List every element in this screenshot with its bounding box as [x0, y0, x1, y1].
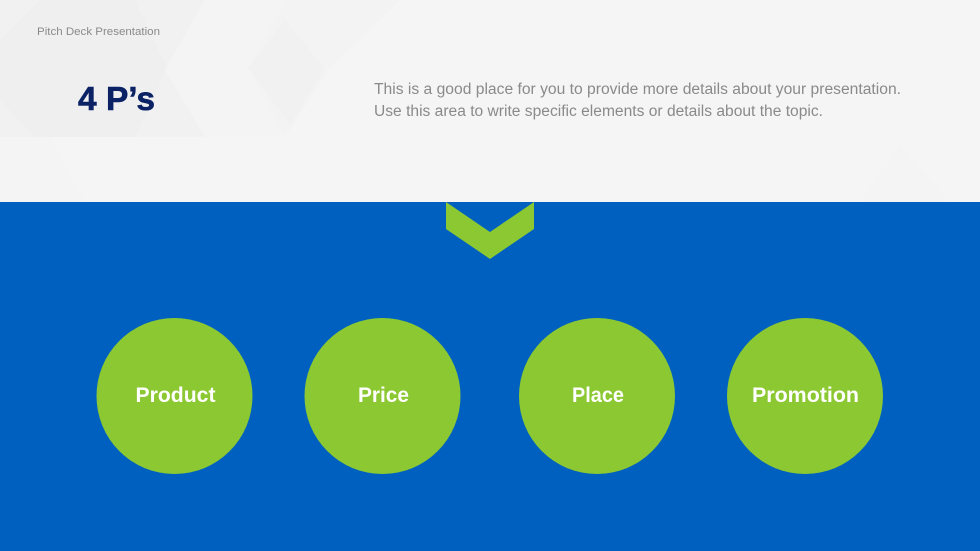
- text block: description: This is a good place for you to provide more details about your presentation.: [374, 81, 901, 98]
- icon: chevron arrow: [446, 202, 534, 259]
- circle: Product: Product: [136, 384, 216, 407]
- text: deck label: Pitch Deck Presentation: [37, 26, 160, 38]
- circle: Place: [519, 318, 675, 474]
- title: 4 P’s: [78, 80, 155, 117]
- circle: Price: Price: [358, 384, 409, 407]
- panel: blue lower background: [0, 202, 980, 551]
- panel: top header background: [0, 0, 980, 202]
- circle: Product: [96, 318, 252, 474]
- circle: Place: Place: [572, 384, 624, 407]
- circle: Promotion: Promotion: [752, 384, 859, 407]
- text block: description: [374, 81, 901, 120]
- circle: Price: [304, 318, 460, 474]
- circle: Promotion: [727, 318, 883, 474]
- text block: description: Use this area to write specific elements or details about the topic.: [374, 103, 823, 120]
